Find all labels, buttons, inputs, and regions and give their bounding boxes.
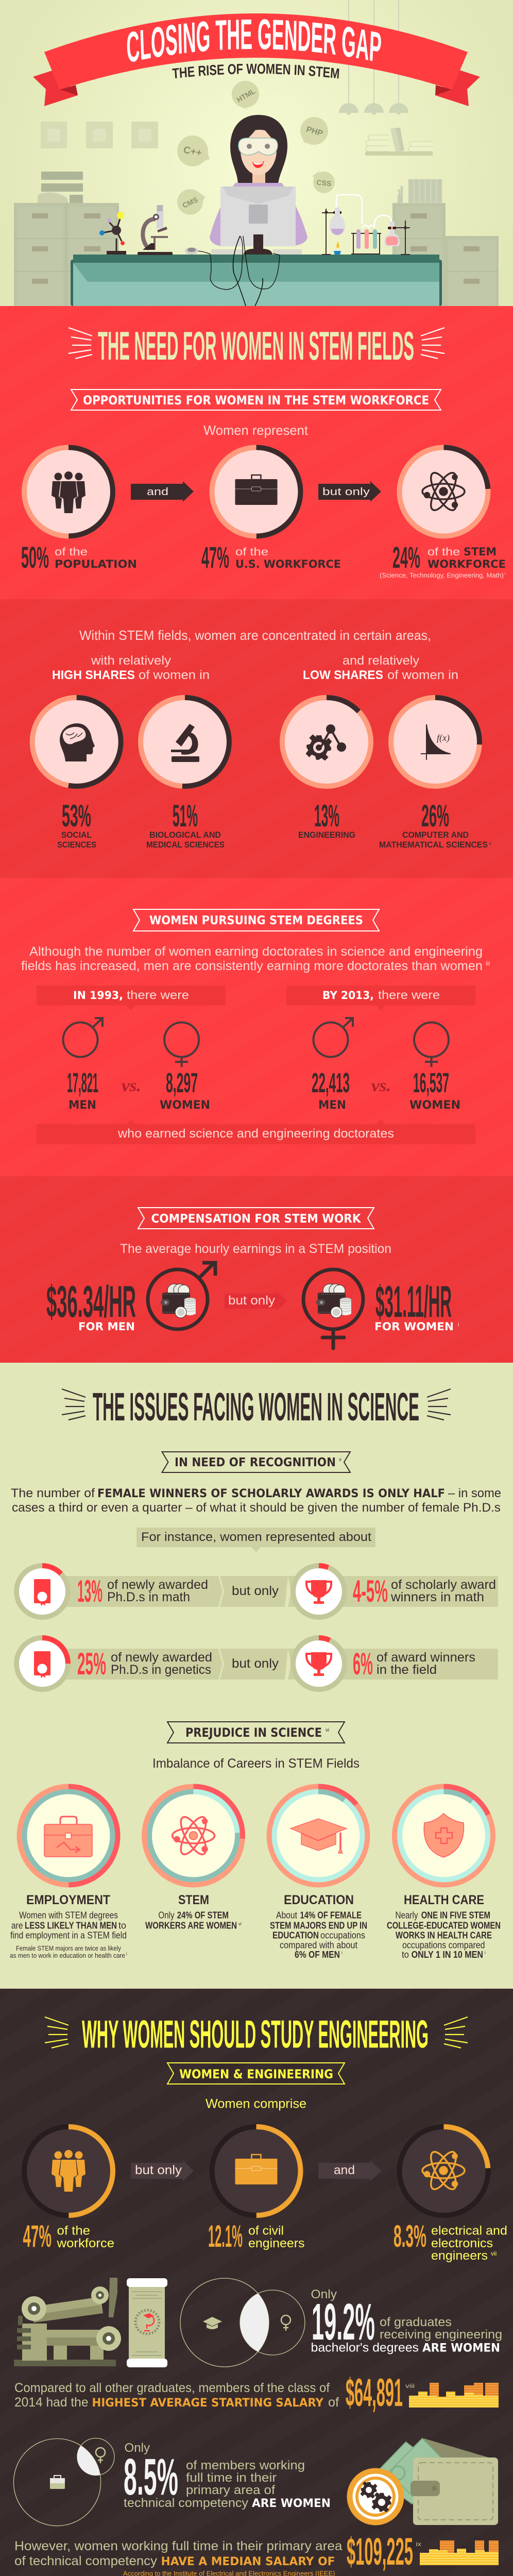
career: employment text: LESS LIKELY THAN MEN — [25, 1921, 117, 1931]
illustration: robot arm — [14, 2278, 121, 2366]
speech bubble: CMS — [177, 189, 205, 215]
ring chart: employment — [20, 1787, 117, 1885]
panel: the need for women in STEM fields: 16,537 — [413, 1067, 449, 1098]
panel: why women should study engineering: $109,225 — [347, 2530, 413, 2573]
career: employment text — [10, 1893, 127, 1959]
labels: fields: SOCIAL — [61, 830, 92, 840]
career: education text: 6% OF MEN — [295, 1950, 340, 1960]
career: STEM text — [145, 1893, 242, 1931]
row: 13% math PhDs vs 4-5% award winners: Ph.D.s in math — [107, 1590, 190, 1604]
career: STEM text: 24% OF STEM — [177, 1910, 229, 1921]
text: median salary: ix — [416, 2540, 421, 2548]
callout: who earned doctorates — [37, 1120, 475, 1144]
labels: vs: vs. — [371, 1076, 391, 1095]
ribbon: opportunities: OPPORTUNITIES FOR WOMEN IN THE STEM WORKFORCE — [83, 393, 429, 408]
callout: in 1993 — [37, 986, 226, 1010]
intro text: Women represent — [203, 422, 309, 438]
stat: women earnings: i — [458, 1322, 459, 1328]
stat: 8.5% of members: primary area of — [186, 2483, 275, 2497]
text: female winners paragraph — [11, 1486, 501, 1515]
text: female winners paragraph: The number of — [11, 1486, 95, 1500]
stat: 8.5% of members: of members working — [186, 2459, 305, 2472]
icon: male symbol 2013 — [313, 1018, 353, 1057]
icon: female symbol with wallet — [303, 1269, 363, 1348]
stat: 47% of the US workforce: 47% — [201, 541, 229, 574]
panel: why women should study engineering: $64,891 — [346, 2371, 403, 2415]
speech bubble: PHP — [300, 117, 328, 145]
career: education text: occupations — [320, 1930, 365, 1941]
text: starting salary: Compared to all other graduates, members of the class of — [14, 2381, 330, 2395]
stat: 8.5% of members: 8.5% — [124, 2448, 178, 2506]
venn diagram: graduates — [180, 2278, 305, 2367]
stat: 50% of the population: 50% — [21, 541, 49, 574]
speech bubble: CSS: CSS — [316, 178, 332, 188]
labels: men and women — [69, 1099, 460, 1112]
text: doctorates paragraph: iii — [486, 960, 490, 967]
stat: 8.5% of members: full time in their — [186, 2471, 277, 2485]
stats: share percentages: 53% — [62, 799, 91, 833]
stat: 12.1% of civil engineers: of civil — [248, 2224, 284, 2238]
career: STEM text: STEM — [178, 1893, 209, 1907]
donut: social sciences 53% — [32, 698, 121, 786]
row: 25% genetics PhDs vs 6% award winners: of newly awarded — [111, 1650, 212, 1665]
ribbon: women and engineering: WOMEN & ENGINEERING — [179, 2067, 333, 2081]
ring chart: health care — [395, 1787, 493, 1885]
icon: male symbol 1993 — [63, 1018, 102, 1057]
heading: high shares: of women in — [139, 668, 210, 682]
speech bubble: C++: C++ — [182, 144, 203, 159]
arrow: but only — [131, 2160, 194, 2181]
stat: men earnings: FOR MEN — [78, 1320, 135, 1333]
donut: 25% — [16, 1638, 68, 1689]
icon: head with brain — [60, 723, 95, 761]
text: median salary: of technical competency — [14, 2554, 158, 2568]
career: education text: About — [276, 1910, 297, 1921]
heading: low shares — [303, 654, 458, 682]
callout: by 2013: BY 2013, — [322, 989, 374, 1002]
chemistry glassware set — [322, 195, 410, 255]
donut: 8.3% electrical engineers — [400, 2127, 488, 2215]
labels: vs: vs. — [122, 1076, 141, 1095]
callout: by 2013 — [286, 986, 475, 1010]
donut: 50% population — [24, 447, 113, 536]
row: 13% math PhDs vs 4-5% award winners: 4-5% — [353, 1574, 388, 1608]
stats: doctorates numbers: 17,821 — [67, 1067, 98, 1098]
pendant lamps — [339, 0, 408, 115]
text: female winners paragraph: cases a third or even a quarter – of what it should be given the number of female Ph.D.s — [12, 1501, 501, 1515]
career: education text: 14% OF FEMALE — [300, 1910, 362, 1921]
career: employment text: to — [118, 1921, 126, 1931]
stat: 47% of the US workforce: of the — [235, 546, 268, 558]
icon: briefcase with trend — [44, 1817, 92, 1857]
career: health care text: i — [485, 1951, 486, 1955]
chart: coin stacks 1 — [409, 2383, 499, 2408]
panel: the issues facing women in science — [0, 1363, 513, 1989]
stats: doctorates numbers: 8,297 — [166, 1067, 198, 1098]
career: STEM text: WORKERS ARE WOMEN — [145, 1921, 237, 1931]
stat: 24% of the STEM workforce: i — [505, 571, 506, 576]
stat: 19.2% of graduates — [311, 2287, 502, 2354]
stats: share percentages: 51% — [173, 799, 198, 833]
row: 25% genetics PhDs vs 6% award winners — [16, 1638, 498, 1689]
career: health care text: ONLY 1 IN 10 MEN — [412, 1950, 483, 1960]
text: doctorates paragraph — [21, 944, 490, 973]
labels: fields: MEDICAL SCIENCES — [146, 840, 225, 850]
heading: high shares — [52, 654, 210, 682]
arrow: but only: but only — [135, 2163, 182, 2177]
stat: 8.5% of members — [124, 2441, 331, 2510]
career: employment text: Women with STEM degrees — [19, 1910, 118, 1921]
stat: 8.3% electrical and electronics engineers: vii — [491, 2250, 497, 2257]
text: median salary — [14, 2530, 421, 2576]
donut: 12.1% civil engineers — [212, 2127, 301, 2215]
callout: in 1993: there were — [127, 988, 189, 1002]
career: education text: compared with about — [280, 1940, 357, 1951]
subtitle: THE RISE OF WOMEN IN STEM — [172, 64, 339, 78]
row: 25% genetics PhDs vs 6% award winners: 6% — [353, 1647, 373, 1681]
ring chart: education — [269, 1787, 368, 1885]
computer cables — [188, 236, 280, 306]
ribbon: women pursuing STEM degrees — [133, 909, 379, 931]
text: imbalance heading: Imbalance of Careers in STEM Fields — [152, 1756, 360, 1771]
text: starting salary: HIGHEST AVERAGE STARTING SALARY — [92, 2397, 324, 2410]
heading: high shares: HIGH SHARES — [52, 668, 135, 682]
stat: men earnings — [46, 1277, 136, 1333]
stat: 8.5% of members: technical competency — [124, 2496, 248, 2510]
donut: 47% workforce — [212, 447, 301, 536]
donut: 4-5% — [293, 1566, 345, 1617]
career: education text — [270, 1893, 367, 1960]
row: 25% genetics PhDs vs 6% award winners: in the field — [377, 1663, 437, 1677]
stat: 47% of the US workforce: U.S. WORKFORCE — [235, 558, 341, 570]
donut: 24% STEM workforce — [400, 447, 488, 536]
woman with goggles — [210, 115, 307, 246]
speech bubble: C++ — [177, 135, 210, 166]
ribbon: in need of recognition — [162, 1452, 350, 1472]
speech bubble: CMS: CMS — [181, 195, 199, 210]
text: median salary: HAVE A MEDIAN SALARY OF — [161, 2555, 335, 2568]
title banner — [33, 13, 480, 106]
labels: men and women: MEN — [318, 1099, 346, 1112]
microscope — [138, 205, 173, 255]
ribbon: women and engineering — [167, 2063, 345, 2084]
stat: 8.3% electrical and electronics engineers: electronics — [431, 2236, 493, 2250]
ribbon: in need of recognition: v — [339, 1457, 341, 1463]
stat: 24% of the STEM workforce — [380, 541, 506, 579]
panel: the need for women in STEM fields — [0, 306, 513, 1363]
labels: men and women: WOMEN — [409, 1099, 460, 1112]
donut: computer and mathematical sciences 26% — [391, 698, 480, 786]
career: employment text: find employment in a STEM field — [10, 1930, 127, 1941]
stat: 47% of the workforce: 47% — [23, 2219, 52, 2253]
title: CLOSING THE GENDER GAP — [127, 19, 381, 62]
career: education text: EDUCATION — [272, 1930, 319, 1941]
stat: 8.3% electrical and electronics engineers: electrical and — [431, 2224, 507, 2238]
callout: who earned doctorates: who earned science and engineering doctorates — [117, 1127, 394, 1141]
illustration: diploma scroll — [127, 2278, 167, 2367]
stat: 24% of the STEM workforce: of the — [427, 546, 460, 558]
ribbon: prejudice in science — [167, 1722, 345, 1743]
stat: 8.5% of members: Only — [125, 2441, 150, 2455]
row: 13% math PhDs vs 4-5% award winners: 13% — [77, 1574, 102, 1608]
labels: vs — [122, 1076, 391, 1095]
text: starting salary: 2014 had the — [14, 2395, 89, 2410]
callout: for instance — [136, 1528, 375, 1552]
mouse — [185, 247, 198, 255]
row: 25% genetics PhDs vs 6% award winners: 25% — [77, 1647, 106, 1681]
stat: 24% of the STEM workforce: WORKFORCE — [427, 558, 506, 570]
labels: fields — [57, 830, 491, 850]
stat: 19.2% of graduates: bachelor's degrees — [311, 2341, 419, 2354]
stat: 8.3% electrical and electronics engineers: engineers — [431, 2249, 488, 2263]
computer monitor — [211, 187, 302, 255]
text: female winners paragraph: – in some — [448, 1486, 501, 1500]
callout: in 1993: IN 1993, — [73, 989, 123, 1002]
ribbon: compensation — [138, 1208, 374, 1229]
donut: engineering 13% — [282, 698, 371, 786]
stat: 47% of the US workforce — [201, 541, 341, 574]
panel: hero illustration — [0, 0, 513, 306]
speech bubble: PHP: PHP — [305, 125, 324, 138]
labels: men and women: MEN — [69, 1099, 96, 1112]
stat: 24% of the STEM workforce: STEM — [464, 546, 497, 558]
speech bubble: HTML — [232, 81, 259, 110]
icon: shield with cross — [424, 1814, 464, 1857]
ribbon: prejudice in science: vi — [326, 1727, 329, 1733]
stat: women earnings — [374, 1277, 459, 1333]
ribbon: prejudice in science: PREJUDICE IN SCIENCE — [185, 1725, 322, 1740]
row: 13% math PhDs vs 4-5% award winners — [16, 1566, 498, 1617]
ring chart: STEM — [144, 1787, 243, 1885]
labels: fields: BIOLOGICAL AND — [149, 830, 221, 840]
illustration: wallet with banknotes and gears — [350, 2438, 498, 2525]
row: 13% math PhDs vs 4-5% award winners: of newly awarded — [107, 1578, 208, 1592]
molecule model — [99, 212, 126, 255]
icon: female symbol 1993 — [164, 1022, 199, 1067]
text: women comprise: Women comprise — [206, 2097, 306, 2111]
icon: female symbol 2013 — [414, 1022, 449, 1067]
labels: fields: SCIENCES — [57, 840, 96, 850]
heading: low shares: and relatively — [343, 654, 419, 668]
panel: why women should study engineering — [0, 1989, 513, 2576]
stat: 12.1% of civil engineers: 12.1% — [208, 2219, 243, 2253]
row: 25% genetics PhDs vs 6% award winners: of award winners — [377, 1650, 475, 1665]
career: employment text: as men to work in education or health care — [10, 1952, 125, 1959]
title — [127, 19, 381, 62]
text: concentration intro: Within STEM fields, women are concentrated in certain areas, — [79, 628, 431, 643]
callout: for instance: For instance, women represented about — [141, 1530, 371, 1544]
text: starting salary: viii — [405, 2382, 415, 2389]
stats: doctorates numbers: 22,413 — [312, 1067, 350, 1098]
career: health care text: WORKS IN HEALTH CARE — [396, 1930, 492, 1941]
career: employment text: Female STEM majors are twice as likely — [16, 1944, 121, 1952]
stat: 19.2% of graduates: 19.2% — [312, 2293, 375, 2351]
row: 25% genetics PhDs vs 6% award winners: Ph.D.s in genetics — [111, 1663, 211, 1677]
stat: 50% of the population — [21, 541, 137, 574]
donut: 47% workforce — [24, 2127, 113, 2215]
stat: 12.1% of civil engineers: engineers — [248, 2236, 305, 2250]
labels: fields: COMPUTER AND — [402, 830, 469, 840]
stat: 50% of the population: POPULATION — [55, 558, 137, 570]
labels: fields: MATHEMATICAL SCIENCES — [379, 840, 488, 850]
row: 13% math PhDs vs 4-5% award winners: of scholarly award — [391, 1578, 496, 1592]
text: average hourly earnings: The average hourly earnings in a STEM position — [120, 1242, 391, 1256]
arrow: but only: but only — [228, 1294, 275, 1308]
icon: male symbol with wallet — [148, 1262, 215, 1329]
callout: by 2013: there were — [378, 988, 440, 1002]
venn diagram: members — [13, 2438, 114, 2526]
career: STEM text: Only — [159, 1910, 174, 1921]
donut: 13% — [16, 1566, 68, 1617]
stats: doctorates numbers — [67, 1067, 449, 1098]
career: health care text: ONE IN FIVE STEM — [421, 1910, 490, 1921]
career: health care text: Nearly — [396, 1910, 418, 1921]
text: starting salary — [14, 2371, 415, 2415]
row: 13% math PhDs vs 4-5% award winners: but only — [232, 1584, 279, 1598]
stat: 19.2% of graduates: of graduates — [380, 2315, 452, 2329]
stats: share percentages — [62, 799, 449, 833]
arrow: and — [131, 481, 194, 502]
stat: women earnings: FOR WOMEN — [374, 1320, 454, 1333]
career: employment text: are — [11, 1921, 23, 1931]
labels: men and women: WOMEN — [160, 1099, 210, 1112]
speech bubble: HTML: HTML — [235, 87, 257, 104]
arrow: but only — [225, 1291, 287, 1311]
stat: 24% of the STEM workforce: 24% — [392, 541, 420, 574]
arrow: but only — [318, 481, 381, 502]
arrow: but only: but only — [322, 486, 370, 498]
stat: 47% of the workforce: of the — [57, 2224, 90, 2238]
ribbon: opportunities — [71, 389, 441, 410]
arrow: and: and — [334, 2163, 355, 2177]
career: employment text: EMPLOYMENT — [26, 1893, 110, 1907]
text: doctorates paragraph: Although the number of women earning doctorates in science and engineering — [29, 944, 483, 959]
icon: microscope — [171, 724, 199, 762]
trays and phone on cabinet — [37, 172, 83, 203]
icon: f(x) graph: f(x) — [437, 733, 450, 743]
panel: the need for women in STEM fields: $36.34/HR — [46, 1277, 136, 1327]
career: education text: STEM MAJORS END UP IN — [270, 1921, 367, 1931]
binders and pencil cup — [398, 179, 442, 203]
speech bubble: CSS — [312, 171, 335, 193]
heading: high shares: with relatively — [91, 654, 171, 668]
stat: 19.2% of graduates: Only — [311, 2287, 337, 2301]
stat: 19.2% of graduates: ARE WOMEN — [422, 2342, 500, 2354]
text: doctorates paragraph: fields has increased, men are consistently earning more doctorates than women — [21, 959, 483, 973]
ribbon: compensation: COMPENSATION FOR STEM WORK — [151, 1212, 362, 1226]
stat: 8.3% electrical and electronics engineers — [394, 2219, 507, 2263]
arrow: and: and — [147, 486, 168, 498]
desk — [71, 255, 442, 306]
shelf with books — [365, 128, 433, 156]
career: education text: EDUCATION — [284, 1893, 354, 1907]
row: 13% math PhDs vs 4-5% award winners: winners in math — [390, 1590, 484, 1604]
career: health care text: occupations compared — [402, 1940, 485, 1951]
career: health care text: HEALTH CARE — [404, 1893, 484, 1907]
arrow: and — [318, 2160, 381, 2181]
heading: low shares: LOW SHARES — [303, 668, 383, 682]
icon: gear and network — [306, 724, 346, 760]
career: STEM text: vi — [238, 1922, 242, 1926]
donut: 6% — [293, 1638, 345, 1689]
stat: 47% of the workforce — [23, 2219, 114, 2253]
ribbon: in need of recognition: IN NEED OF RECOGNITION — [175, 1456, 336, 1469]
stat: 24% of the STEM workforce: (Science, Technology, Engineering, Math) — [380, 571, 504, 579]
career: health care text — [387, 1893, 501, 1960]
career: health care text: to — [402, 1950, 409, 1960]
ribbon: women pursuing STEM degrees: WOMEN PURSUING STEM DEGREES — [149, 914, 363, 927]
career: education text: i — [341, 1951, 343, 1955]
row: 25% genetics PhDs vs 6% award winners: but only — [232, 1656, 279, 1671]
stat: 8.3% electrical and electronics engineers: 8.3% — [394, 2219, 426, 2253]
panel: the need for women in STEM fields: 26% — [421, 799, 449, 833]
career: employment text: i — [126, 1952, 127, 1956]
text: starting salary: of — [328, 2395, 339, 2410]
stat: 50% of the population: of the — [55, 546, 88, 558]
icon: graduation cap — [290, 1819, 347, 1853]
stat: 8.5% of members: ARE WOMEN — [252, 2497, 331, 2510]
filing cabinets — [14, 203, 499, 306]
text: median salary: However, women working full time in their primary area — [14, 2539, 343, 2553]
wall frames — [41, 122, 158, 148]
labels: fields: ii — [489, 841, 491, 846]
stats: share percentages: 13% — [314, 799, 339, 833]
text: female winners paragraph: FEMALE WINNERS OF SCHOLARLY AWARDS IS ONLY HALF — [97, 1487, 445, 1500]
donut: biological and medical sciences 51% — [141, 698, 229, 786]
stat: 47% of the workforce: workforce — [56, 2236, 114, 2250]
heading: low shares: of women in — [387, 668, 458, 682]
icon: f(x) graph — [421, 724, 451, 760]
chart: coin stacks 2 — [420, 2540, 499, 2565]
labels: fields: ENGINEERING — [298, 830, 355, 840]
stat: 19.2% of graduates: receiving engineering — [380, 2328, 502, 2342]
